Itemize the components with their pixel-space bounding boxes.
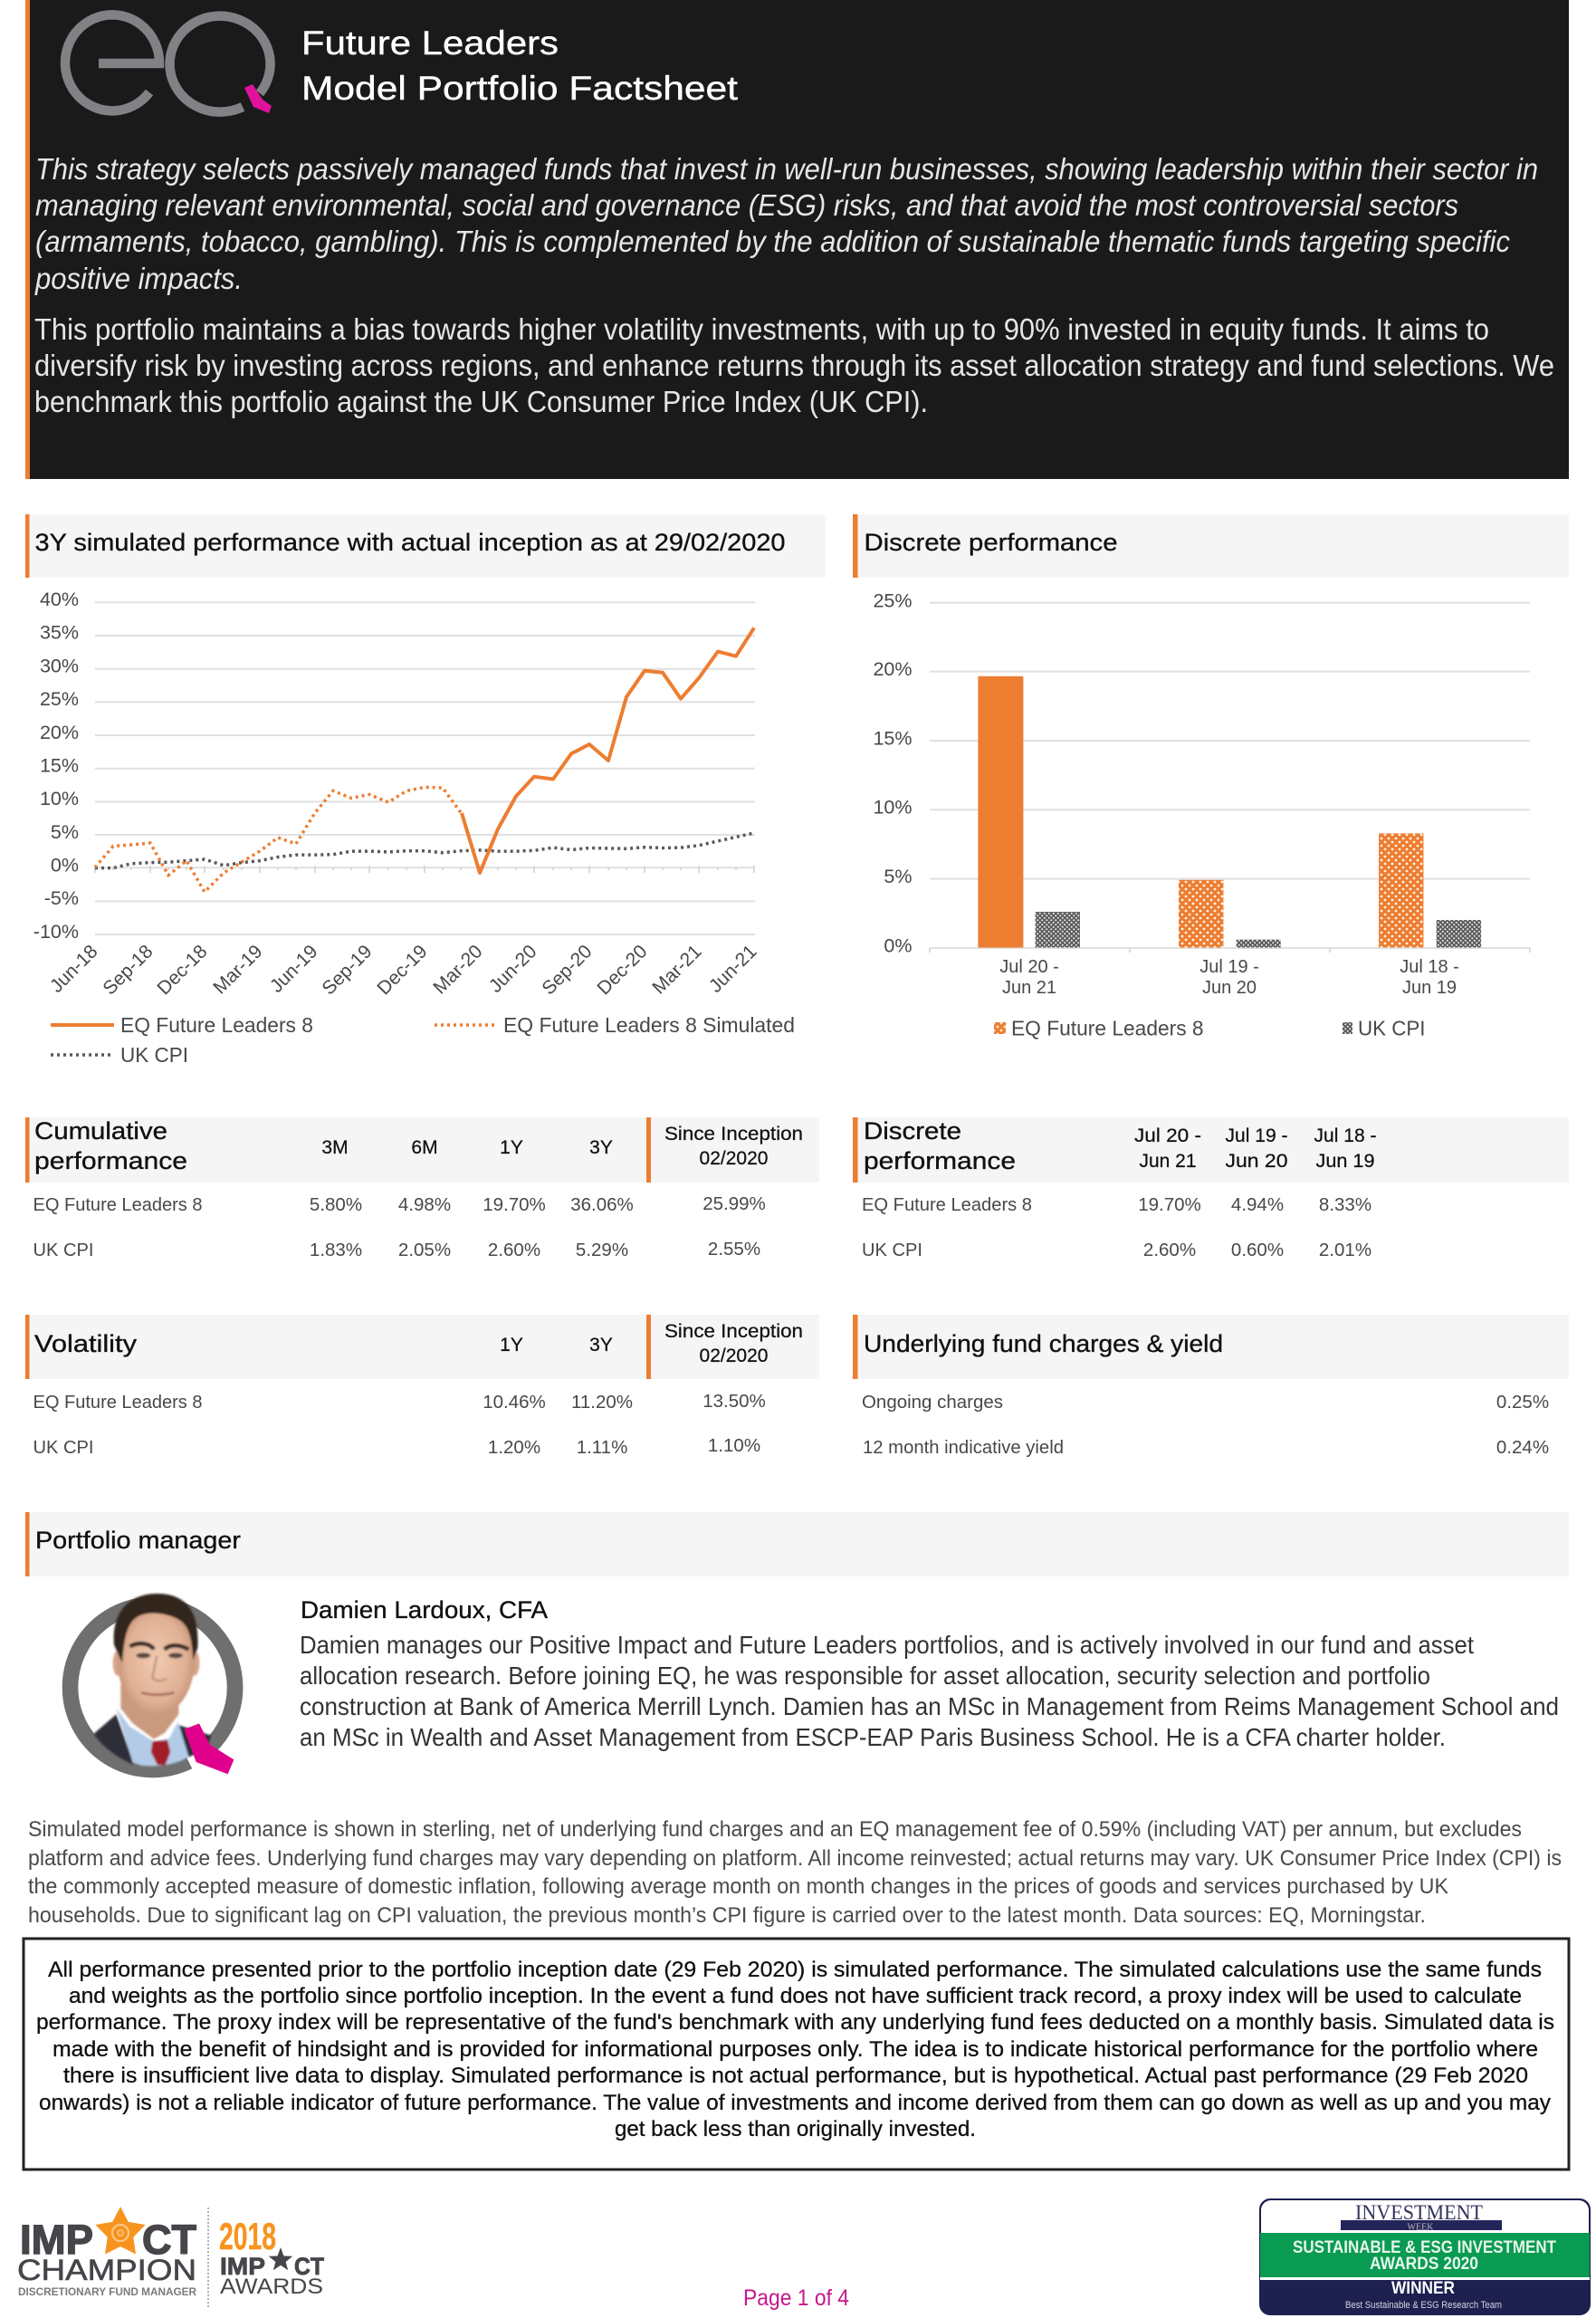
y axis labels: 5% (884, 866, 913, 887)
icon: 2018 Impact Awards logo: AWARDS (220, 2275, 323, 2299)
y axis labels: 5% (51, 821, 79, 843)
table: cumulative performance: 4.98% (398, 1194, 451, 1215)
x axis labels: Dec-20 (593, 941, 652, 999)
panel: discrete performance bar chart (853, 514, 1569, 1039)
table: discrete performance: Jul 19 - (1226, 1125, 1287, 1146)
text block: strategy summary: managing relevant environmental, social and governance (ESG) risks, and that avoid the most controversial sectors (35, 188, 1458, 222)
table: volatility: Since Inception (664, 1321, 803, 1342)
table: volatility: 1Y (500, 1335, 523, 1355)
table: cumulative performance: UK CPI (33, 1240, 94, 1260)
legend: UK CPI (1358, 1016, 1425, 1039)
table: cumulative performance: 19.70% (483, 1194, 546, 1215)
y axis labels: -5% (44, 887, 79, 909)
text block: portfolio description (34, 312, 1554, 418)
series: UK CPI (95, 833, 754, 868)
callout: simulated performance disclaimer (24, 1939, 1569, 2170)
callout: simulated performance disclaimer: performance. The proxy index will be representative of the fund's benchmark with any underlying fund fees deducted on a monthly basis. Simulated data is (36, 2010, 1554, 2035)
icon: Impact Champion logo: CT (142, 2217, 196, 2263)
icon: Impact Champion logo: CHAMPION (17, 2254, 196, 2286)
legend: EQ Future Leaders 8 Simulated (503, 1013, 795, 1037)
legend: EQ Future Leaders 8 (120, 1013, 313, 1037)
x axis labels: Mar-19 (209, 941, 267, 999)
y axis labels: 0% (884, 934, 913, 956)
category labels: Jun 20 (1202, 978, 1257, 998)
text block: methodology note: the commonly accepted measure of domestic inflation, following average month on month changes in the prices of goods and services purchased by UK (28, 1874, 1449, 1899)
y axis labels: 25% (40, 688, 79, 710)
table: cumulative performance: 2.55% (708, 1239, 760, 1260)
table: cumulative performance: 5.80% (310, 1194, 362, 1215)
heading: Discrete (864, 1117, 961, 1145)
table: cumulative performance: 2.05% (398, 1240, 451, 1260)
heading: Discrete performance (864, 529, 1117, 556)
text block: manager biography: an MSc in Wealth and Asset Management from ESCP-EAP Paris Business School. He is a CFA charter holder. (300, 1723, 1446, 1751)
icon: 2018 Impact Awards logo (208, 2208, 324, 2308)
icon: Impact Champion logo: IMP (20, 2217, 93, 2263)
table: volatility: UK CPI (33, 1437, 94, 1458)
legend: EQ Future Leaders 8 (1011, 1016, 1204, 1039)
text block: manager biography (300, 1631, 1559, 1751)
text block: strategy summary: positive impacts. (34, 262, 243, 295)
callout: simulated performance disclaimer: there is insufficient live data to display. Simulated performance is not actual performance, but is hypothetical. Actual past performance (29 Feb 2020 (63, 2064, 1528, 2088)
icon: Impact Champion logo: DISCRETIONARY FUND MANAGER (18, 2285, 196, 2298)
table: cumulative performance: 1Y (500, 1137, 523, 1158)
table: discrete performance: UK CPI (862, 1240, 922, 1260)
text block: methodology note (28, 1817, 1562, 1928)
icon: Investment Week award badge: WEEK (1408, 2222, 1434, 2233)
y axis labels: 10% (40, 788, 79, 809)
table: underlying fund charges and yield: 12 month indicative yield (863, 1437, 1064, 1458)
icon: 2018 Impact Awards logo: CT (294, 2253, 324, 2280)
y axis labels: 15% (40, 755, 79, 777)
title: Future Leaders (301, 24, 559, 62)
heading: Volatility (34, 1330, 138, 1357)
y axis labels: 40% (40, 589, 79, 610)
category labels: Jun 21 (1002, 978, 1056, 998)
table: discrete performance (853, 1117, 1569, 1260)
y axis labels: 0% (51, 855, 79, 876)
text block: portfolio description: benchmark this portfolio against the UK Consumer Price Index (UK CPI). (34, 385, 928, 418)
table: cumulative performance: 25.99% (702, 1193, 766, 1214)
page number: Page 1 of 4 (743, 2285, 849, 2311)
x axis labels: Jun-20 (485, 941, 541, 997)
table: volatility: EQ Future Leaders 8 (33, 1392, 203, 1413)
y axis labels: 30% (40, 656, 79, 677)
table: cumulative performance: 02/2020 (700, 1148, 768, 1169)
heading: performance (34, 1147, 187, 1174)
x axis labels: Dec-18 (153, 941, 212, 999)
category labels: Jul 20 - (999, 957, 1059, 977)
y axis labels: 10% (873, 797, 913, 819)
panel: 3Y simulated performance line chart (25, 514, 826, 1067)
callout: simulated performance disclaimer: All performance presented prior to the portfolio inception date (29 Feb 2020) is simulated performance. The simulated calculations use the same funds (48, 1958, 1542, 1982)
text block: methodology note: Simulated model performance is shown in sterling, net of underlying fund charges and an EQ management fee of 0.59% (including VAT) per annum, but excludes (28, 1817, 1522, 1842)
table: discrete performance: 2.60% (1143, 1240, 1196, 1260)
callout: simulated performance disclaimer: get back less than originally invested. (615, 2117, 976, 2141)
table: underlying fund charges and yield: 0.24% (1496, 1437, 1549, 1458)
heading: Portfolio manager (35, 1527, 241, 1554)
x axis labels: Jun-21 (705, 941, 761, 997)
table: cumulative performance: 6M (411, 1137, 438, 1158)
panel: portfolio manager (25, 1512, 1569, 1774)
table: volatility: 1.10% (708, 1435, 760, 1456)
text block: manager biography: Damien manages our Positive Impact and Future Leaders portfolios, and is actively involved in our fund and asset (300, 1631, 1474, 1659)
x axis labels: Jun-19 (266, 941, 322, 997)
y axis labels: -10% (33, 921, 79, 943)
text block: methodology note: households. Due to significant lag on CPI valuation, the previous month’s CPI figure is carried over to the latest month. Data sources: EQ, Morningstar. (28, 1903, 1426, 1928)
table: discrete performance: Jun 21 (1139, 1151, 1197, 1172)
bars (978, 676, 1481, 947)
icon: Investment Week award badge: WINNER (1391, 2279, 1455, 2298)
category labels: Jul 19 - (1199, 957, 1259, 977)
manager name: Damien Lardoux, CFA (301, 1596, 548, 1624)
table: cumulative performance: EQ Future Leaders 8 (33, 1194, 203, 1215)
heading: Underlying fund charges & yield (864, 1330, 1223, 1357)
legend (994, 1016, 1425, 1039)
heading: Cumulative (34, 1117, 167, 1145)
callout: simulated performance disclaimer: and weights as the portfolio since portfolio inception. In the event a fund does not have sufficient track record, a proxy index will be used to calculate (69, 1984, 1522, 2008)
text block: portfolio description: This portfolio maintains a bias towards higher volatility investments, with up to 90% invested in equity funds. It aims to (34, 312, 1489, 346)
legend (51, 1013, 795, 1067)
table: discrete performance: 8.33% (1319, 1194, 1371, 1215)
table: discrete performance: 19.70% (1138, 1194, 1201, 1215)
text block: strategy summary (34, 152, 1538, 295)
table: discrete performance: 0.60% (1231, 1240, 1284, 1260)
series: EQ Future Leaders 8 Simulated (95, 787, 461, 892)
icon: EQ logo (65, 14, 272, 113)
icon: Impact Champion logo (17, 2207, 196, 2298)
heading (34, 1117, 187, 1174)
icon: Investment Week award badge: INVESTMENT (1355, 2201, 1483, 2224)
y axis labels (873, 590, 913, 956)
x axis labels: Sep-19 (318, 941, 377, 999)
category labels: Jun 19 (1402, 978, 1457, 998)
text block: manager biography: allocation research. Before joining EQ, he was responsible for asset allocation, security selection and portfolio (300, 1662, 1430, 1690)
icon: 2018 Impact Awards logo: 2018 (219, 2215, 276, 2257)
table: volatility: 1.20% (488, 1437, 540, 1458)
title: Model Portfolio Factsheet (301, 70, 739, 107)
x axis labels: Mar-21 (648, 941, 706, 999)
table: discrete performance: Jun 20 (1226, 1151, 1287, 1172)
table: cumulative performance: 2.60% (488, 1240, 540, 1260)
icon: Investment Week award badge: AWARDS 2020 (1370, 2255, 1478, 2274)
icon: Investment Week award badge (1259, 2198, 1591, 2315)
table: cumulative performance: 3Y (589, 1137, 613, 1158)
y axis labels: 25% (873, 590, 913, 612)
y axis labels: 20% (873, 658, 913, 680)
icon: manager portrait in Q ring (71, 1594, 235, 1774)
title (301, 24, 739, 107)
callout: simulated performance disclaimer: made with the benefit of hindsight and is provided for informational purposes only. The idea is to indicate historical performance for the portfolio where (53, 2037, 1538, 2062)
table: cumulative performance: 36.06% (570, 1194, 634, 1215)
table: discrete performance: 2.01% (1319, 1240, 1371, 1260)
y axis labels: 20% (40, 722, 79, 743)
x axis labels: Dec-19 (373, 941, 432, 999)
table: volatility: 1.11% (577, 1437, 627, 1458)
icon: 2018 Impact Awards logo: IMP (220, 2253, 265, 2280)
series: EQ Future Leaders 8 (462, 627, 754, 873)
table: volatility: 13.50% (702, 1391, 766, 1412)
legend: UK CPI (120, 1043, 188, 1067)
heading (864, 1117, 1016, 1174)
table: volatility: 10.46% (483, 1392, 546, 1413)
category labels: Jul 18 - (1400, 957, 1459, 977)
heading: performance (864, 1147, 1016, 1174)
table: discrete performance: 4.94% (1231, 1194, 1284, 1215)
callout: simulated performance disclaimer: onwards) is not a reliable indicator of future performance. The value of investments and income derived from them can go down as well as up and you may (39, 2091, 1552, 2115)
heading: 3Y simulated performance with actual inception as at 29/02/2020 (34, 529, 786, 556)
y axis labels: 15% (873, 728, 913, 750)
x axis labels: Mar-20 (429, 941, 487, 999)
category labels (999, 957, 1459, 998)
table: discrete performance: Jul 20 - (1134, 1125, 1201, 1146)
table: volatility: 02/2020 (700, 1346, 768, 1366)
x axis labels: Jun-18 (46, 941, 102, 997)
table: discrete performance: Jun 19 (1316, 1151, 1374, 1172)
table: discrete performance: Jul 18 - (1314, 1125, 1376, 1146)
text block: strategy summary: (armaments, tobacco, gambling). This is complemented by the addition of sustainable thematic funds targeting specific (35, 225, 1510, 258)
table: cumulative performance: 3M (321, 1137, 349, 1158)
table: underlying fund charges and yield: 0.25% (1496, 1392, 1549, 1413)
table: cumulative performance: Since Inception (664, 1124, 803, 1145)
table: volatility: 11.20% (571, 1392, 633, 1413)
table: cumulative performance: 5.29% (576, 1240, 628, 1260)
table: cumulative performance: 1.83% (310, 1240, 362, 1260)
x axis labels (46, 941, 761, 999)
x axis labels: Sep-18 (99, 941, 158, 999)
table: discrete performance: EQ Future Leaders 8 (862, 1194, 1032, 1215)
y axis labels: 35% (40, 621, 79, 643)
table: volatility: 3Y (589, 1335, 613, 1355)
panel: header (25, 0, 1569, 479)
table: volatility (25, 1315, 819, 1458)
y axis labels (33, 589, 79, 943)
table: underlying fund charges and yield (853, 1315, 1569, 1458)
x axis labels: Sep-20 (538, 941, 597, 999)
table: underlying fund charges and yield: Ongoing charges (862, 1392, 1003, 1413)
icon: Investment Week award badge: SUSTAINABLE & ESG INVESTMENT (1293, 2238, 1556, 2257)
icon: Investment Week award badge: Best Sustainable & ESG Research Team (1345, 2300, 1502, 2311)
table: cumulative performance (25, 1117, 819, 1260)
